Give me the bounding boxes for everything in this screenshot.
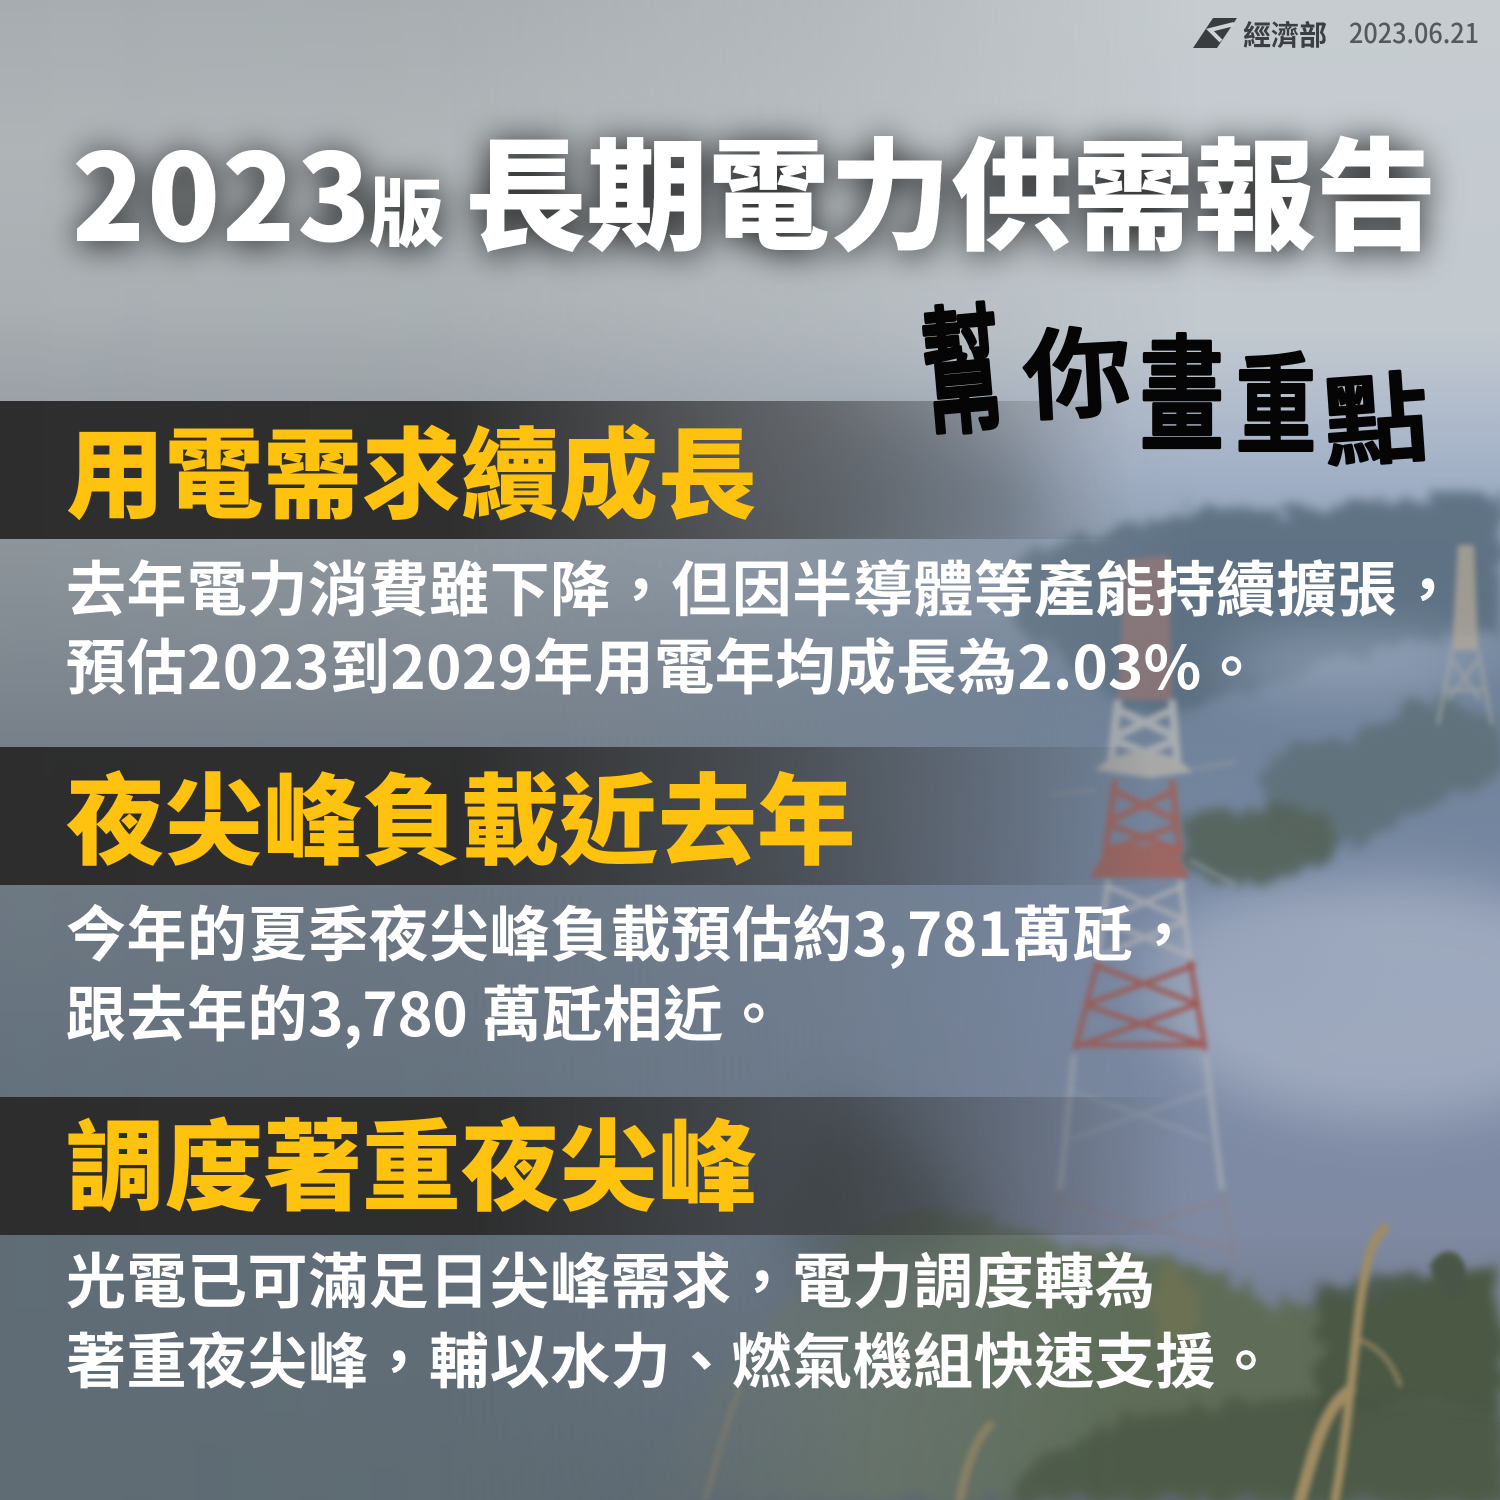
handwritten subtitle: 畫 (1140, 295, 1224, 476)
bottom forest (620, 1210, 1500, 1500)
fog (1160, 880, 1500, 1120)
handwritten subtitle: 幫 (913, 260, 1009, 464)
handwritten subtitle: 重 (1236, 317, 1316, 476)
body text: 今年的夏季夜尖峰負載預估約3,781萬瓩， (66, 887, 1194, 974)
heading band (0, 747, 1150, 885)
title: 2023 (72, 102, 372, 276)
body text (66, 887, 1194, 1054)
panel: evening peak load (0, 743, 1194, 1054)
main tower (1050, 555, 1235, 1260)
tree tuft (1180, 806, 1334, 882)
ministry name: 經濟部 (1243, 14, 1327, 54)
body text (66, 542, 1458, 707)
body text: 去年電力消費雖下降，但因半導體等產能持續擴張， (66, 542, 1458, 629)
distant tower (1438, 545, 1492, 725)
body text: 光電已可滿足日尖峰需求，電力調度轉為 (66, 1234, 1155, 1321)
heading band (0, 401, 1130, 539)
heading: 用電需求續成長 (66, 397, 757, 539)
handwritten subtitle: 你 (1019, 292, 1134, 440)
panel: dispatch focus (0, 1089, 1276, 1401)
handwritten subtitle (913, 260, 1433, 488)
title: 長期電力供需報告 (465, 99, 1437, 275)
body text: 跟去年的3,780 萬瓩相近。 (66, 967, 784, 1054)
panel: demand growth (0, 397, 1458, 707)
header: ministry logo and date (1193, 12, 1479, 54)
body text: 著重夜尖峰，輔以水力、燃氣機組快速支援。 (66, 1314, 1276, 1401)
body text (66, 1234, 1276, 1401)
heading band (0, 1097, 1180, 1235)
left colour field (0, 0, 1108, 1432)
far ridge (1010, 495, 1500, 720)
reeds (705, 1228, 1400, 1500)
icon: ministry logo (1193, 18, 1237, 48)
body text: 預估2023到2029年用電年均成長為2.03%。 (66, 620, 1262, 707)
middle forest hill (1255, 703, 1500, 852)
title: 版 (369, 153, 444, 262)
handwritten subtitle: 點 (1318, 339, 1433, 488)
heading: 調度著重夜尖峰 (66, 1089, 757, 1231)
date: 2023.06.21 (1349, 12, 1479, 51)
heading: 夜尖峰負載近去年 (66, 743, 856, 885)
